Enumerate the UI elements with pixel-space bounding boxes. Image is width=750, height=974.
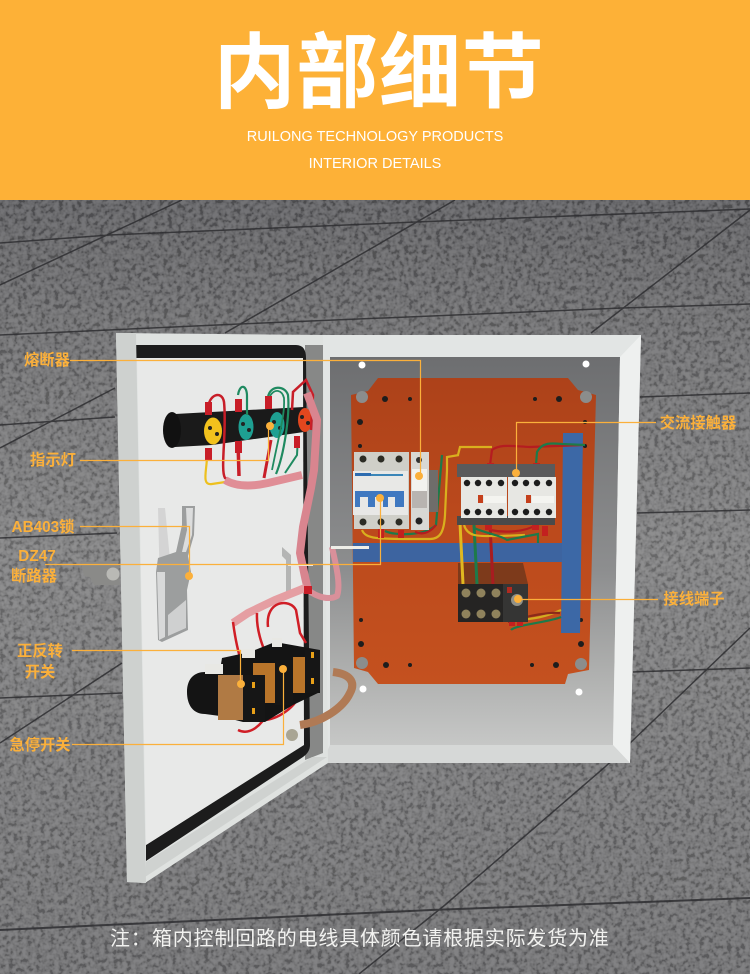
door lock latch (81, 506, 195, 642)
label: emergency stop: 急停开关 (9, 736, 71, 754)
label: breaker second line: 断路器 (11, 567, 58, 585)
vertical wiring duct (561, 433, 583, 633)
footer note: 箱内控制回路的电线具体颜色请根据实际发货为准 (152, 927, 610, 950)
cabinet body (322, 335, 641, 763)
door lower flange (145, 757, 327, 877)
subtitle line one: RUILONG TECHNOLOGY PRODUCTS (247, 128, 503, 145)
cabinet inner walls (330, 357, 620, 745)
product photo panel (0, 200, 750, 974)
orange mounting plate (351, 378, 596, 684)
circuit breaker (353, 452, 409, 529)
label: switch second line: 开关 (25, 664, 55, 681)
door inner panel (137, 358, 304, 845)
indicator lamps (163, 407, 312, 448)
mounting holes (358, 360, 590, 696)
asphalt floor background (0, 200, 750, 974)
label: terminal: 接线端子 (663, 590, 725, 608)
terminal block (458, 584, 528, 622)
footer note: 注： (110, 928, 152, 950)
callout leader lines (45, 360, 658, 744)
ground bolt (286, 729, 298, 741)
label: lock: AB403锁 (12, 518, 75, 536)
label: breaker: DZ47 (18, 548, 56, 565)
wires (362, 443, 585, 630)
label: indicator light: 指示灯 (30, 451, 76, 469)
cabinet frame (322, 335, 641, 763)
door outer frame (116, 333, 328, 883)
hinge bracket (282, 547, 291, 592)
contactors (457, 464, 556, 525)
fuse holder (411, 452, 438, 530)
label: contactor: 交流接触器 (660, 414, 737, 432)
wire terminals (378, 463, 548, 626)
callout marker dots (185, 422, 522, 688)
horizontal wiring duct (353, 543, 562, 562)
callout labels (9, 351, 737, 754)
subtitle line two: INTERIOR DETAILS (309, 155, 441, 172)
header banner (0, 0, 750, 200)
door left strip (116, 333, 146, 883)
plate screws and holes (356, 391, 592, 670)
terminal crimps on door (205, 396, 312, 675)
cable ties (288, 546, 369, 566)
ground strap (300, 672, 352, 725)
rotary switches (187, 638, 320, 722)
title: 内部细节 (214, 28, 544, 119)
door right side strip (305, 345, 323, 760)
door gasket (136, 345, 310, 861)
plate shadow above terminal block (458, 563, 528, 584)
label: fuse: 熔断器 (24, 351, 71, 369)
cabinet door (81, 333, 369, 883)
door wiring (205, 380, 338, 732)
label: switch: 正反转 (17, 643, 63, 660)
